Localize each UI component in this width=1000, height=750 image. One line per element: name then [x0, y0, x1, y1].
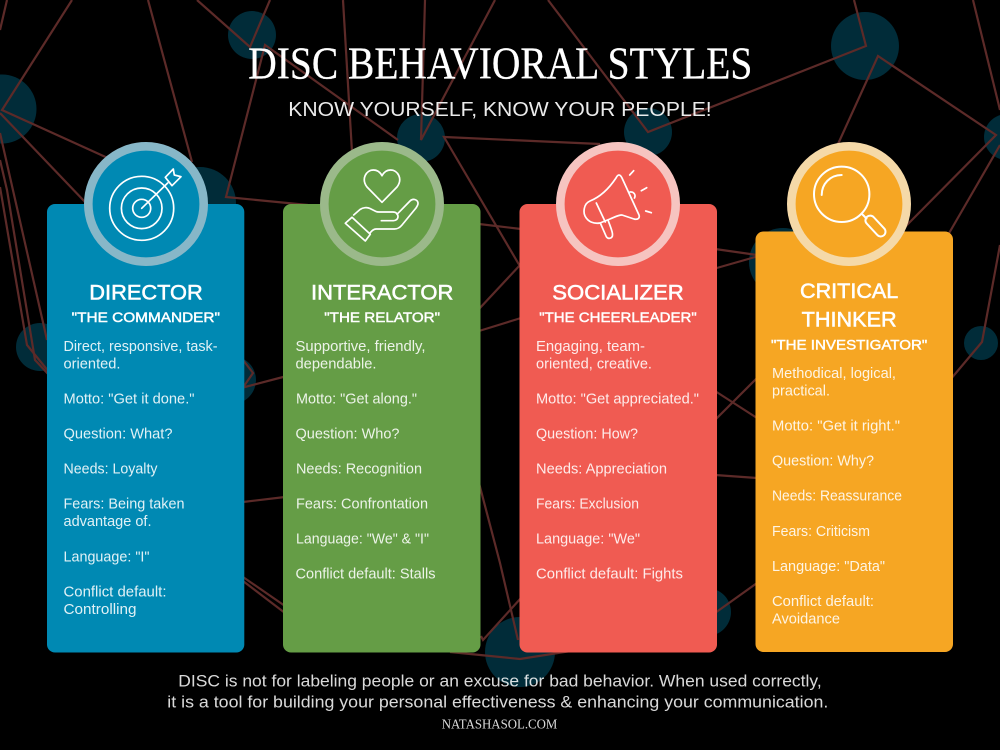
critical thinker details: Question: Why? [772, 454, 874, 470]
critical thinker details: Fears: Criticism [772, 524, 870, 540]
socializer details: Conflict default: Fights [536, 567, 683, 583]
critical thinker details: Conflict default: [772, 594, 874, 610]
director details: Conflict default: [64, 585, 166, 601]
footer note [167, 673, 828, 712]
subtitle: KNOW YOURSELF, KNOW YOUR PEOPLE! [288, 98, 712, 121]
interactor details: Motto: "Get along." [296, 392, 417, 408]
socializer details: oriented, creative. [536, 356, 652, 372]
interactor details [296, 339, 436, 583]
icon: target with arrow [88, 146, 204, 262]
director details: Direct, responsive, task- [64, 339, 218, 355]
critical thinker details: Motto: "Get it right." [772, 418, 900, 434]
critical thinker card background [756, 232, 953, 652]
critical thinker nickname: "THE INVESTIGATOR" [771, 337, 927, 353]
panel: director [47, 146, 244, 653]
critical thinker details: Language: "Data" [772, 559, 885, 575]
director details: oriented. [64, 356, 120, 372]
critical thinker details: Needs: Reassurance [772, 489, 902, 505]
icon: megaphone [560, 146, 676, 262]
director details: Controlling [64, 602, 136, 618]
icon: heart over open hand [324, 146, 440, 262]
director heading: DIRECTOR [89, 282, 203, 304]
title: DISC BEHAVIORAL STYLES [248, 39, 752, 89]
director details: Question: What? [64, 426, 172, 442]
interactor details: Supportive, friendly, [296, 339, 426, 355]
socializer details: Needs: Appreciation [536, 462, 667, 478]
interactor details: Needs: Recognition [296, 462, 422, 478]
socializer details [536, 339, 699, 583]
panel: socializer [520, 146, 717, 653]
critical thinker heading [800, 280, 898, 332]
critical thinker details: Avoidance [772, 612, 840, 628]
director details: Needs: Loyalty [64, 462, 158, 478]
director nickname: "THE COMMANDER" [72, 309, 220, 325]
socializer details: Language: "We" [536, 532, 640, 548]
director card background [47, 204, 244, 652]
critical thinker heading: CRITICAL [800, 280, 898, 303]
critical thinker heading: THINKER [802, 308, 897, 332]
socializer card background [520, 204, 717, 652]
interactor heading: INTERACTOR [311, 282, 453, 304]
director details: Motto: "Get it done." [64, 392, 194, 408]
icon: magnifying glass [791, 146, 907, 262]
interactor nickname: "THE RELATOR" [324, 309, 440, 325]
socializer heading: SOCIALIZER [552, 282, 684, 304]
critical thinker details: practical. [772, 384, 830, 400]
footer note: DISC is not for labeling people or an excuse for bad behavior. When used correctly, [178, 673, 822, 691]
critical thinker details [772, 366, 902, 628]
footer note: it is a tool for building your personal effectiveness & enhancing your communication. [167, 694, 828, 712]
socializer details: Motto: "Get appreciated." [536, 392, 699, 408]
interactor details: Fears: Confrontation [296, 497, 428, 513]
director details: advantage of. [64, 514, 152, 530]
socializer details: Fears: Exclusion [536, 497, 639, 513]
director details [64, 339, 218, 618]
panel: interactor [283, 146, 480, 653]
critical thinker details: Methodical, logical, [772, 366, 896, 382]
socializer nickname: "THE CHEERLEADER" [539, 309, 697, 325]
socializer details: Question: How? [536, 426, 638, 442]
director details: Fears: Being taken [64, 497, 184, 513]
interactor details: dependable. [296, 356, 376, 372]
director details: Language: "I" [64, 550, 150, 566]
panel: critical thinker [756, 146, 953, 652]
interactor details: Question: Who? [296, 426, 400, 442]
interactor details: Conflict default: Stalls [296, 567, 436, 583]
source credit: NATASHASOL.COM [442, 717, 558, 732]
interactor card background [283, 204, 480, 652]
interactor details: Language: "We" & "I" [296, 532, 429, 548]
socializer details: Engaging, team- [536, 339, 645, 355]
